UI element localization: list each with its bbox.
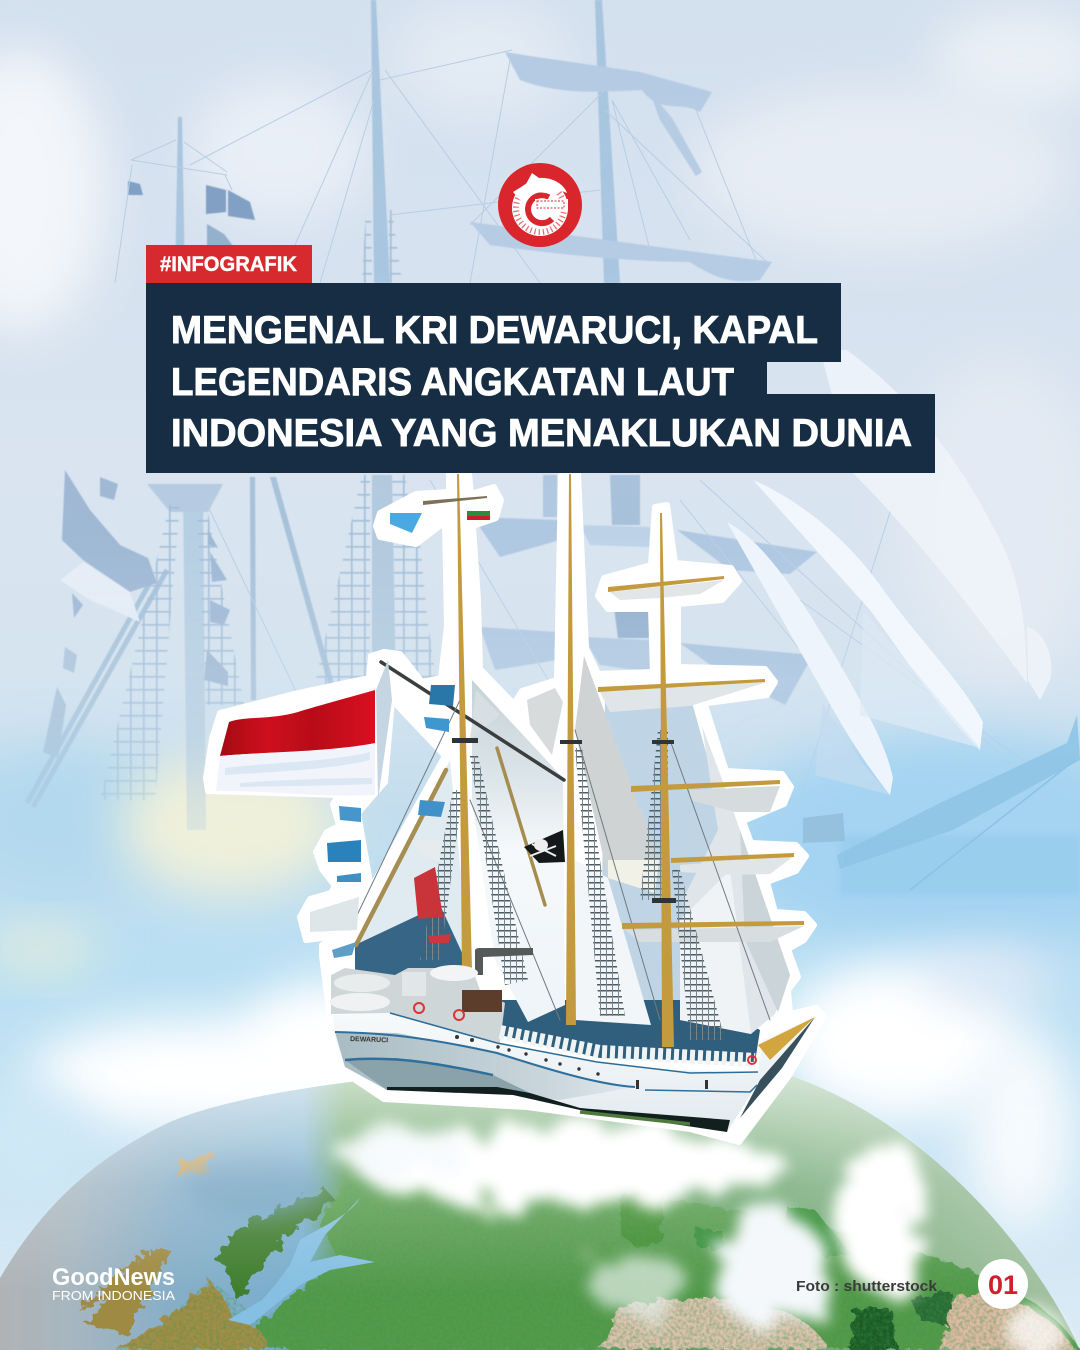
superstructure [330,948,756,1064]
photo credit: Foto : shutterstock [796,1278,938,1295]
logo [498,163,582,247]
sky through rigging [355,695,775,1062]
hull [333,1013,815,1132]
background ghost ship [27,0,1050,830]
logo eagle head [513,173,567,200]
goodnews logo [52,1264,176,1303]
logo ring [512,180,568,236]
ghost furled sails [470,52,817,705]
page number [978,1259,1028,1309]
ghost flags [43,181,255,758]
pirate flag [524,830,565,863]
masts and yards [423,474,804,1047]
horizon clouds [0,928,1075,1230]
signal flags [310,511,490,958]
ghost booms [27,570,167,807]
ghost ratlines [100,210,438,800]
title: LEGENDARIS ANGKATAN LAUT [171,361,734,404]
page number: 01 [988,1270,1018,1300]
background white sails [727,350,1051,795]
background bowsprit and shore [803,715,1080,895]
ghost masts [147,0,650,830]
globe [0,1065,1080,1350]
ship sticker [206,474,824,1142]
goodnews logo: GoodNews [52,1264,175,1291]
indonesian flag [216,660,392,800]
hull name: DEWARUCI [350,1036,388,1044]
globe texture [116,1188,1078,1350]
globe atmosphere haze [0,1065,1080,1350]
title [146,283,935,473]
background clouds and glow [0,0,1080,955]
white sticker outline [206,474,824,1142]
goodnews logo: FROM INDONESIA [52,1289,176,1303]
globe land [78,1152,1080,1350]
boom and stays [350,662,770,1020]
tag: infografik [146,245,312,283]
sails [470,580,804,1034]
globe clouds [330,1125,1068,1350]
globe ocean shade [185,1153,325,1217]
tag: infografik: #INFOGRAFIK [160,253,297,276]
logo g bar [535,199,568,210]
title: INDONESIA YANG MENAKLUKAN DUNIA [171,412,912,455]
title: MENGENAL KRI DEWARUCI, KAPAL [171,309,818,352]
ghost rigging [115,50,1050,800]
ratlines [420,730,725,1040]
globe baltic sea [228,1198,375,1325]
